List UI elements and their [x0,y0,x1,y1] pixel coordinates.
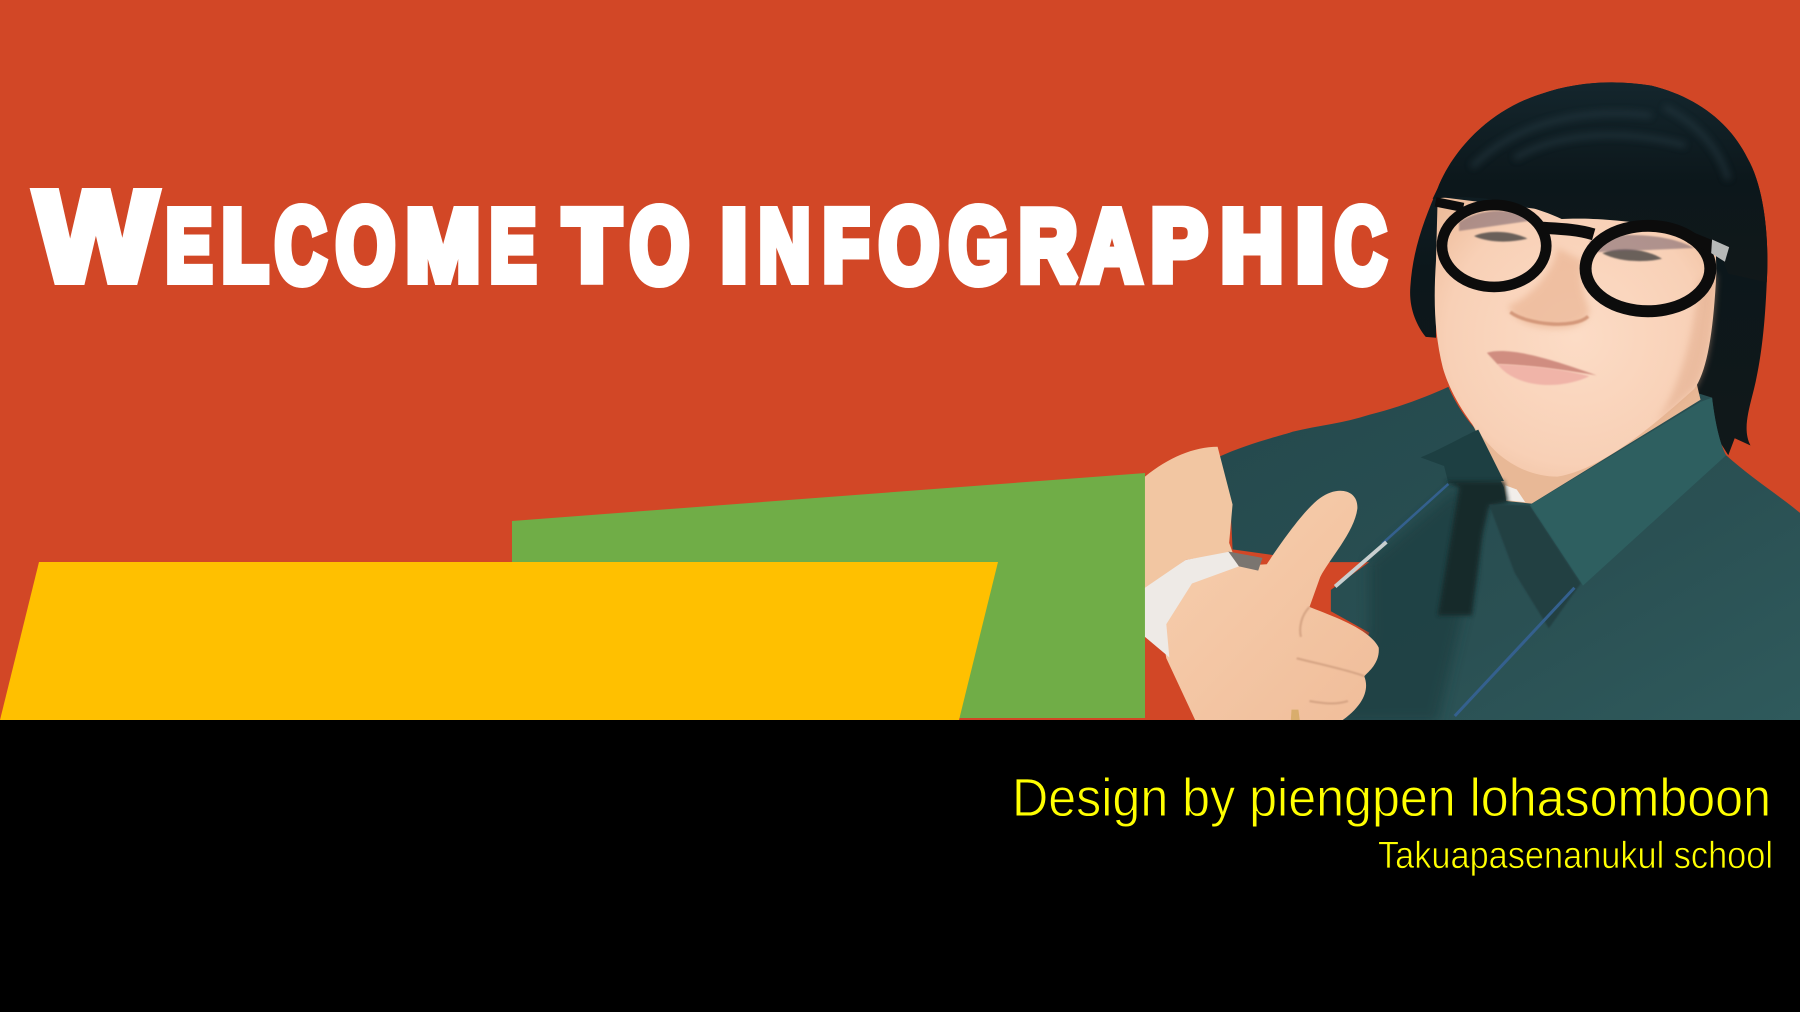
left temple [1436,202,1463,207]
title: M [406,190,480,302]
title: C [1335,187,1386,305]
title: E [166,190,212,302]
title: G [949,187,1008,305]
watch band [1145,551,1239,657]
watch clasp [1228,551,1262,571]
temple metal [1711,239,1729,262]
title: I [721,190,747,302]
nose shadow [1508,248,1589,328]
collar left [1421,430,1504,483]
hair silhouette [1410,82,1767,455]
title: A [1083,190,1141,302]
title: H [1221,190,1283,302]
upper lip [1487,351,1597,375]
title: O [630,187,689,305]
eye right [1602,249,1662,261]
title: R [1019,190,1077,302]
shirt [1218,387,1800,722]
right lens rim [1586,226,1710,311]
title: C [275,187,326,305]
neck [1472,355,1701,504]
inner collar [1489,504,1581,628]
yellow parallelogram [0,562,998,720]
title: P [1151,190,1207,302]
title: O [879,187,939,305]
lower lip [1498,364,1589,385]
hair highlight strands [1472,107,1728,180]
hand with raised thumb [1160,491,1379,722]
placket [1438,481,1508,616]
title: T [564,190,620,302]
lanyard clasp [1335,542,1386,586]
bottom black band [0,720,1800,1012]
arm [1145,447,1233,590]
bridge [1538,228,1594,234]
right temple [1690,237,1726,252]
title: F [823,190,869,302]
nose tip [1510,312,1588,324]
ring [1291,710,1300,722]
title: N [759,190,810,302]
finger creases [1297,607,1364,703]
lens tint [1459,211,1694,252]
green parallelogram [512,473,1145,718]
title: W [36,166,156,307]
white undershirt [1505,485,1525,502]
title: E [490,190,536,302]
bangs [1433,82,1767,282]
title: L [222,190,268,302]
title: I [1296,190,1324,302]
cheek shading [1656,274,1716,423]
title: O [336,187,395,305]
shirt shadow near placket [1339,487,1472,722]
glasses [1436,202,1726,311]
collar right [1530,398,1726,586]
lanyard left [1382,484,1448,544]
portrait illustration [1145,82,1800,722]
face [1435,197,1716,477]
left lens rim [1442,205,1546,287]
lanyard right [1455,588,1574,716]
background [0,0,1800,720]
eye left [1474,232,1527,242]
